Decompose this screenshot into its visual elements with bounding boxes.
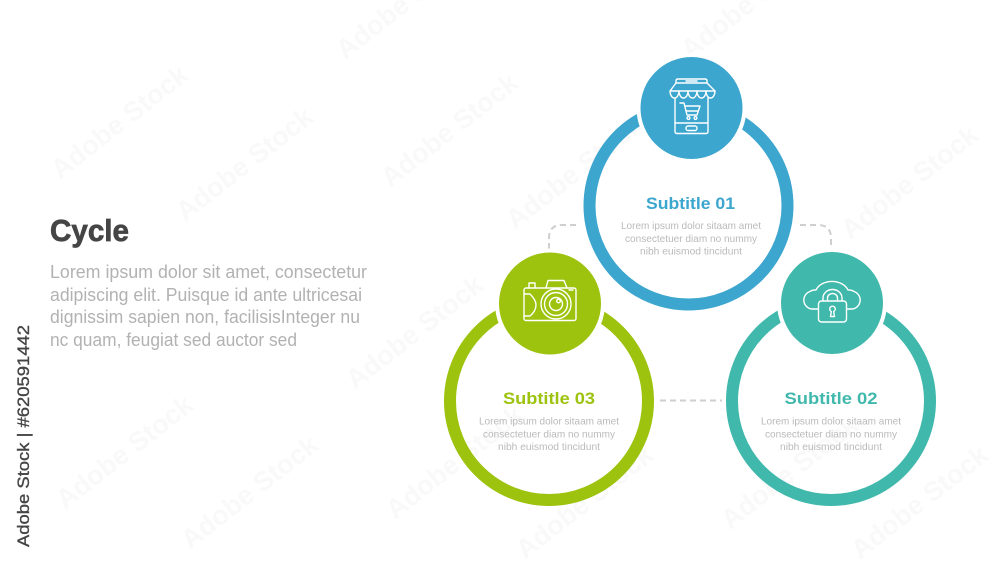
subtitle 03 text: nibh euismod tincidunt xyxy=(498,441,600,453)
ring 01 xyxy=(590,106,788,304)
intro paragraph: Lorem ipsum dolor sit amet, consectetur xyxy=(50,261,367,282)
subtitle 01 heading: Subtitle 01 xyxy=(646,194,735,213)
text: Adobe Stock xyxy=(380,399,530,525)
subtitle 01 text: consectetuer diam no nummy xyxy=(625,233,758,245)
intro paragraph: dignissim sapien non, facilisisInteger nu xyxy=(50,306,360,327)
icon: camera xyxy=(524,280,576,320)
text: Adobe Stock xyxy=(835,119,985,245)
icon: cloud lock xyxy=(804,281,860,322)
text: Adobe Stock xyxy=(340,269,490,395)
intro paragraph: adipiscing elit. Puisque id ante ultricesai xyxy=(50,284,362,305)
text: Adobe Stock xyxy=(500,109,650,235)
subtitle 02 text: Lorem ipsum dolor sitaam amet xyxy=(761,416,901,428)
text: Adobe Stock xyxy=(175,429,325,555)
title: Cycle xyxy=(50,213,129,248)
intro paragraph: nc quam, feugiat sed auctor sed xyxy=(50,329,297,350)
text: Adobe Stock xyxy=(170,101,320,227)
text: Adobe Stock xyxy=(715,409,865,535)
text: Adobe Stock xyxy=(45,59,195,185)
badge 03 xyxy=(495,248,605,358)
text: Adobe Stock xyxy=(845,439,995,563)
stock id label: Adobe Stock | #620591442 xyxy=(14,325,33,547)
subtitle 02 text: consectetuer diam no nummy xyxy=(765,428,898,440)
subtitle 03 heading: Subtitle 03 xyxy=(503,389,595,408)
panel: subtitle 02 xyxy=(732,248,930,500)
text: Adobe Stock xyxy=(50,389,200,515)
connector: top to left xyxy=(549,225,576,250)
icon: mobile shop xyxy=(670,79,715,134)
text: Adobe Stock xyxy=(375,67,525,193)
subtitle 03 text xyxy=(479,416,619,453)
panel: subtitle 03 xyxy=(450,248,648,500)
connector: top to right xyxy=(800,225,831,250)
subtitle 03 text: consectetuer diam no nummy xyxy=(483,428,616,440)
subtitle 01 text xyxy=(621,220,761,258)
subtitle 03 text: Lorem ipsum dolor sitaam amet xyxy=(479,416,619,428)
subtitle 02 text xyxy=(761,416,901,453)
badge 02 xyxy=(777,248,887,358)
badge 01 xyxy=(636,53,746,163)
subtitle 01 text: nibh euismod tincidunt xyxy=(640,246,742,258)
subtitle 02 text: nibh euismod tincidunt xyxy=(780,441,882,453)
ring 03 xyxy=(450,302,648,500)
subtitle 02 heading: Subtitle 02 xyxy=(784,389,878,408)
panel: subtitle 01 xyxy=(590,53,788,304)
subtitle 01 text: Lorem ipsum dolor sitaam amet xyxy=(621,220,761,232)
connector: left to right xyxy=(660,400,722,402)
text: Adobe Stock xyxy=(510,439,660,563)
intro paragraph xyxy=(50,261,367,350)
ring 02 xyxy=(732,302,930,500)
